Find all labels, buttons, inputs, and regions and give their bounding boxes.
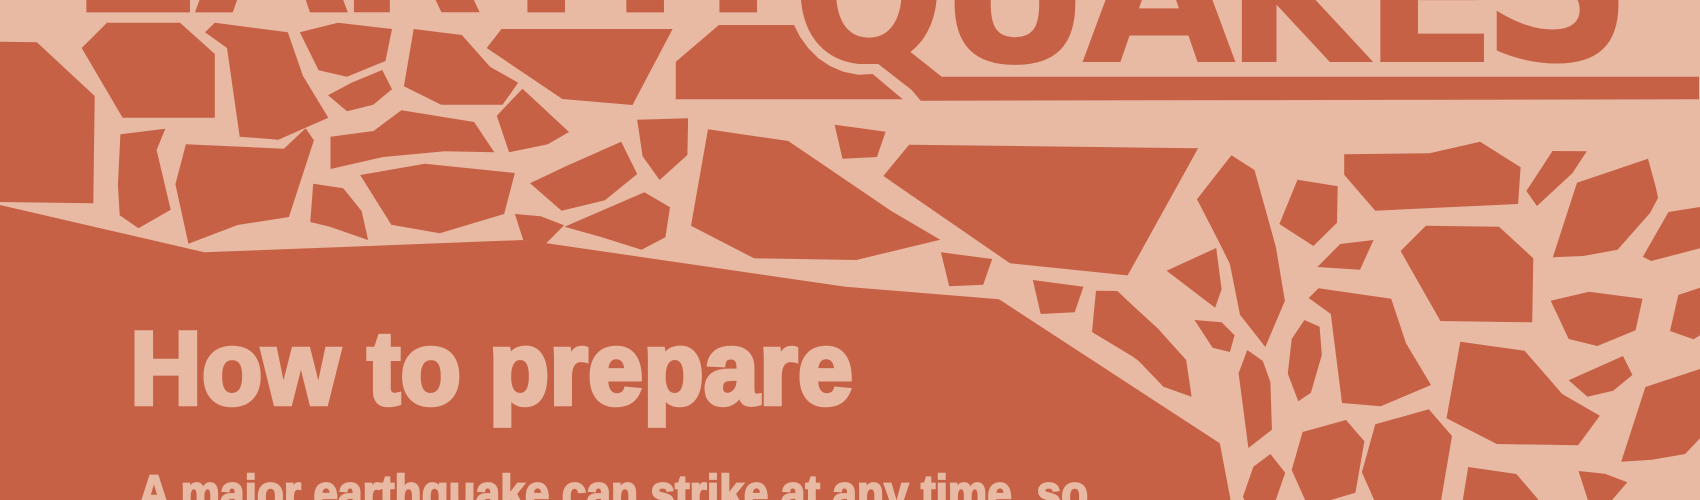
title first half, shifted upward <box>68 0 775 60</box>
rubble: centre cluster <box>676 25 1285 397</box>
title <box>86 0 1618 65</box>
heading: How to prepare <box>130 311 853 427</box>
title second half <box>801 0 1618 65</box>
fault band extending from the Q tail <box>877 51 1699 101</box>
ground panel below the fault line <box>0 205 1231 500</box>
rubble: right cluster <box>1194 142 1700 500</box>
rubble: left cluster <box>0 23 688 250</box>
